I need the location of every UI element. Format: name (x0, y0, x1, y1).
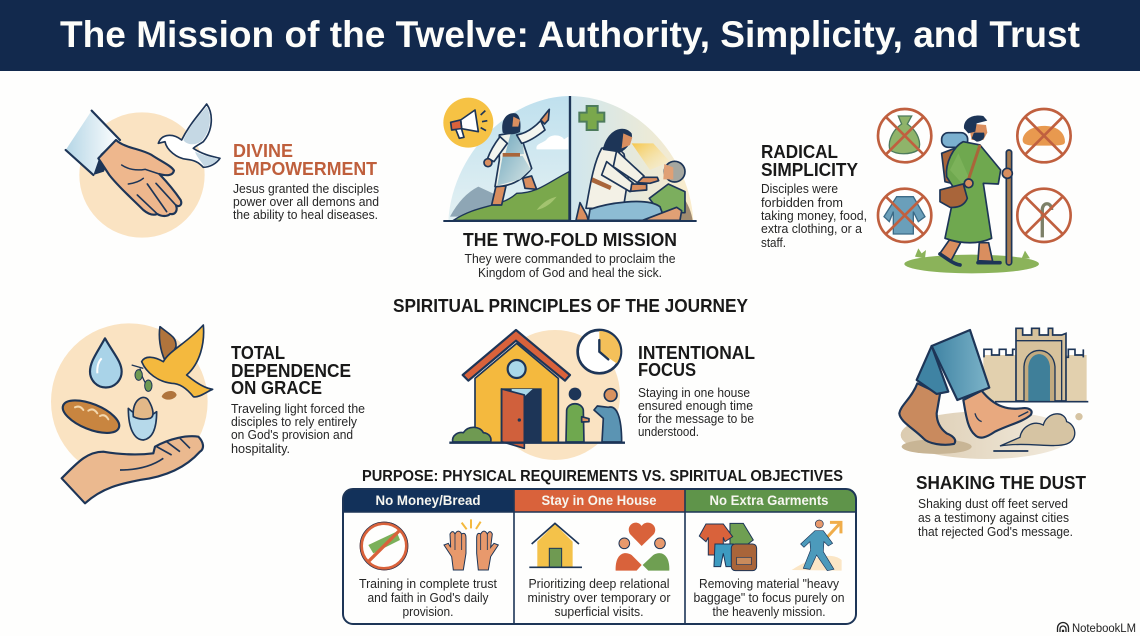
text: two-fold mission body: Kingdom of God and heal the sick. (478, 266, 662, 280)
heading: the two-fold mission: THE TWO-FOLD MISSION (463, 230, 677, 250)
heading: divine empowerment (233, 141, 377, 179)
text: total dependence body (231, 402, 365, 456)
column: no money or bread: No Money/Bread (376, 492, 480, 508)
text: column 2: Prioritizing deep relational (528, 577, 670, 591)
text: radical simplicity body (761, 182, 867, 250)
panel: total dependence on grace (51, 323, 365, 503)
icon: preaching and healing scene (443, 96, 697, 221)
icon: house, clock and two people (449, 330, 625, 460)
text: column 1 (359, 577, 497, 619)
panel: radical simplicity (761, 109, 1071, 273)
text: column 1: provision. (402, 605, 454, 619)
text: column 1: and faith in God's daily (368, 591, 489, 605)
heading: intentional focus: INTENTIONAL (638, 343, 755, 363)
icon: no extra clothing (878, 189, 931, 242)
text: intentional focus body (638, 386, 754, 439)
column: no extra garments (694, 492, 844, 619)
heading: intentional focus (638, 343, 755, 380)
text: column 2: ministry over temporary or (528, 591, 670, 605)
text: shaking the dust body: Shaking dust off feet served (918, 497, 1068, 511)
icon: no bread (1017, 109, 1071, 162)
text: intentional focus body: for the message to be (638, 412, 754, 426)
text: shaking the dust body (918, 497, 1073, 539)
text: column 2 (528, 577, 670, 619)
heading: total dependence on grace (231, 343, 351, 398)
column: stay in one house: Stay in One House (542, 492, 657, 508)
heading: total dependence on grace: ON GRACE (231, 378, 322, 398)
heading: intentional focus: FOCUS (638, 360, 696, 380)
icon: house and two people with heart (529, 523, 669, 571)
text: total dependence body: Traveling light forced the (231, 402, 365, 416)
text: two-fold mission body (464, 252, 676, 280)
heading: radical simplicity: SIMPLICITY (761, 160, 858, 180)
text: radical simplicity body: forbidden from (761, 196, 843, 210)
icon: hand and dove (66, 104, 220, 238)
icon: no money and raised hands (360, 519, 498, 570)
heading: radical simplicity: RADICAL (761, 142, 838, 162)
heading: divine empowerment: EMPOWERMENT (233, 159, 377, 179)
heading: total dependence on grace: TOTAL (231, 343, 285, 363)
icon: water, bread, dove and open hand (51, 323, 213, 503)
text: radical simplicity body: taking money, food, (761, 209, 867, 223)
notebooklm logo: NotebookLM (1072, 623, 1136, 635)
text: divine empowerment body (233, 182, 379, 222)
heading: shaking the dust: SHAKING THE DUST (916, 473, 1086, 493)
text: column 3: Removing material "heavy (699, 577, 840, 591)
heading: radical simplicity (761, 142, 858, 180)
text: two-fold mission body: They were commanded to proclaim the (464, 252, 676, 266)
panel: divine empowerment (66, 104, 379, 238)
text: total dependence body: disciples to rely entirely (231, 415, 358, 429)
heading: purpose table: PURPOSE: PHYSICAL REQUIREMENTS VS. SPIRITUAL OBJECTIVES (362, 468, 843, 485)
title banner: The Mission of the Twelve: Authority, Simplicity, and Trust (60, 14, 1080, 55)
heading: spiritual principles of the journey: SPIRITUAL PRINCIPLES OF THE JOURNEY (393, 296, 748, 316)
column: no money or bread (359, 492, 498, 619)
text: radical simplicity body: extra clothing, or a (761, 222, 862, 236)
text: intentional focus body: ensured enough time (638, 399, 753, 413)
text: column 1: Training in complete trust (359, 577, 497, 591)
text: intentional focus body: Staying in one house (638, 386, 750, 400)
text: radical simplicity body: staff. (761, 236, 786, 250)
icon: no money (878, 109, 931, 162)
text: radical simplicity body: Disciples were (761, 182, 838, 196)
column: stay in one house (528, 492, 670, 619)
panel: intentional focus (449, 330, 755, 460)
text: total dependence body: on God's provision and (231, 428, 353, 442)
panel: shaking the dust (899, 328, 1088, 539)
text: shaking the dust body: as a testimony against cities (918, 511, 1069, 525)
title banner (0, 0, 1140, 71)
icon: traveller with forbidden items (878, 109, 1071, 273)
icon: no staff (1017, 189, 1071, 242)
traveller (942, 145, 963, 185)
table: physical requirements vs spiritual objectives (343, 489, 856, 624)
heading: total dependence on grace: DEPENDENCE (231, 361, 351, 381)
text: shaking the dust body: that rejected God's message. (918, 525, 1073, 539)
text: column 3: the heavenly mission. (712, 605, 826, 619)
text: divine empowerment body: the ability to heal diseases. (233, 208, 378, 222)
text: intentional focus body: understood. (638, 425, 699, 439)
heading: divine empowerment: DIVINE (233, 141, 293, 161)
text: divine empowerment body: power over all demons and (233, 195, 379, 209)
text: column 2: superficial visits. (554, 605, 644, 619)
text: column 3: baggage" to focus purely on (694, 591, 844, 605)
panel: two-fold mission (443, 96, 697, 280)
text: divine empowerment body: Jesus granted the disciples (233, 182, 379, 196)
text: column 3 (694, 577, 844, 619)
icon: clothes, backpack and walking figure (699, 520, 842, 571)
column: no extra garments: No Extra Garments (710, 492, 829, 508)
text: total dependence body: hospitality. (231, 442, 290, 456)
icon: feet, dust cloud and city gate (899, 328, 1088, 459)
